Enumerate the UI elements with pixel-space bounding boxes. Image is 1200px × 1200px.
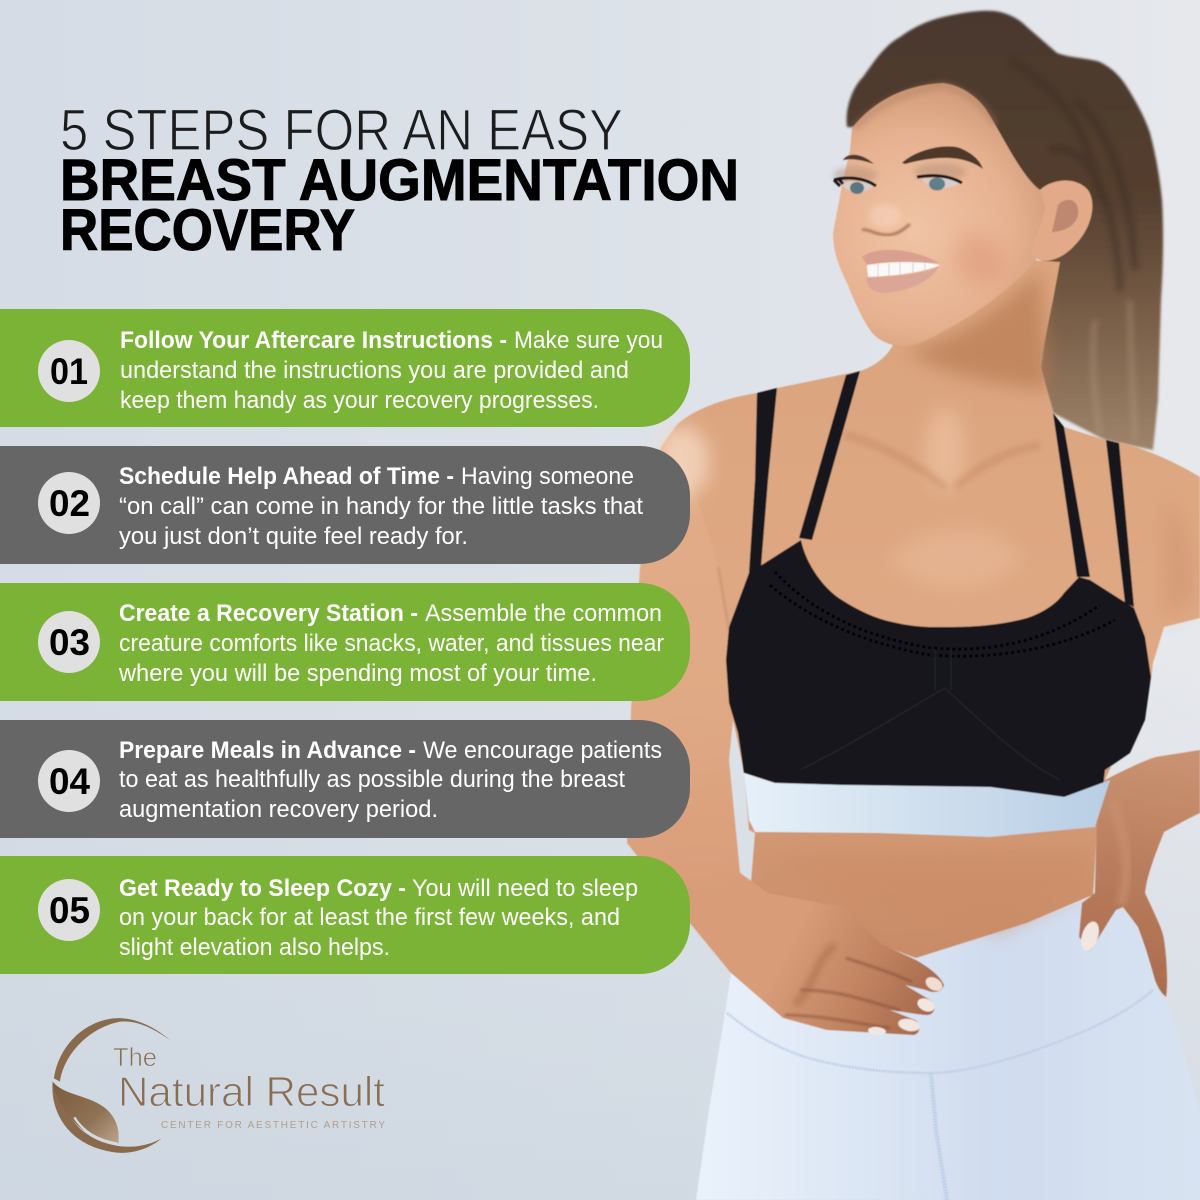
step 05 panel: You will need to sleep bbox=[412, 875, 638, 902]
torso and shoulders bbox=[657, 260, 1200, 958]
step 01 panel: keep them handy as your recovery progresses. bbox=[120, 387, 599, 414]
step 04 panel: 04 bbox=[49, 761, 90, 802]
black sports bra bbox=[726, 540, 1151, 797]
sports bra straps bbox=[749, 371, 1134, 607]
step 04 panel: augmentation recovery period. bbox=[119, 796, 438, 823]
nails bbox=[868, 919, 1102, 1036]
step 01 panel: Make sure you bbox=[514, 327, 663, 354]
title bbox=[60, 98, 739, 263]
leggings bbox=[696, 895, 1200, 1200]
logo: The Natural Result bbox=[52, 1018, 385, 1153]
step 01 panel: Follow Your Aftercare Instructions - bbox=[120, 327, 507, 354]
step 02 panel: Having someone bbox=[461, 463, 634, 490]
ear bbox=[1032, 181, 1092, 261]
pale blue band bbox=[744, 773, 1110, 837]
step 03 panel: where you will be spending most of your time. bbox=[118, 660, 597, 687]
lips and teeth bbox=[862, 250, 940, 265]
step 04 panel: We encourage patients bbox=[423, 737, 662, 764]
step 04 panel bbox=[0, 720, 690, 838]
step 05 panel bbox=[0, 856, 690, 974]
step 02 panel: you just don’t quite feel ready for. bbox=[119, 523, 468, 550]
step 03 panel: 03 bbox=[49, 622, 90, 663]
step 05 panel: on your back for at least the first few weeks, and bbox=[119, 904, 620, 931]
step 05 panel: 05 bbox=[49, 890, 90, 931]
step 03 panel: Assemble the common bbox=[425, 600, 662, 627]
logo: The Natural Result: CENTER FOR AESTHETIC ARTISTRY bbox=[161, 1120, 385, 1131]
title: 5 STEPS FOR AN EASY bbox=[60, 98, 623, 163]
step 03 panel bbox=[0, 583, 690, 701]
photo: smiling woman in sports bra bbox=[627, 11, 1200, 1200]
hair and ponytail bbox=[847, 11, 1163, 450]
eyes bbox=[833, 167, 877, 183]
step 05 panel: slight elevation also helps. bbox=[119, 934, 390, 961]
step 02 panel: 02 bbox=[49, 483, 90, 524]
eyebrows bbox=[843, 155, 874, 164]
step 05 panel: Get Ready to Sleep Cozy - bbox=[119, 875, 406, 902]
left hand on belly bbox=[690, 873, 944, 1035]
step 01 panel: 01 bbox=[50, 351, 88, 392]
logo crescent and leaf bbox=[52, 1018, 170, 1153]
step 02 panel: “on call” can come in handy for the little tasks that bbox=[119, 493, 643, 520]
title: RECOVERY bbox=[60, 198, 355, 263]
step 01 panel: understand the instructions you are provided and bbox=[120, 357, 629, 384]
title: BREAST AUGMENTATION bbox=[60, 148, 739, 213]
step 02 panel: Schedule Help Ahead of Time - bbox=[119, 463, 454, 490]
step 03 panel: creature comforts like snacks, water, and tissues near bbox=[119, 630, 664, 657]
logo: The Natural Result: Natural Result bbox=[118, 1068, 385, 1115]
right hand on hip bbox=[1079, 750, 1200, 997]
step 04 panel: Prepare Meals in Advance - bbox=[119, 737, 416, 764]
logo wordmark: The bbox=[113, 1042, 157, 1072]
face bbox=[833, 83, 1060, 346]
step 02 panel bbox=[0, 446, 690, 564]
step 01 panel bbox=[0, 309, 690, 427]
nose bbox=[862, 224, 910, 235]
left arm bbox=[627, 425, 800, 980]
step 04 panel: to eat as healthfully as possible during the breast bbox=[119, 766, 625, 793]
step 03 panel: Create a Recovery Station - bbox=[119, 600, 418, 627]
